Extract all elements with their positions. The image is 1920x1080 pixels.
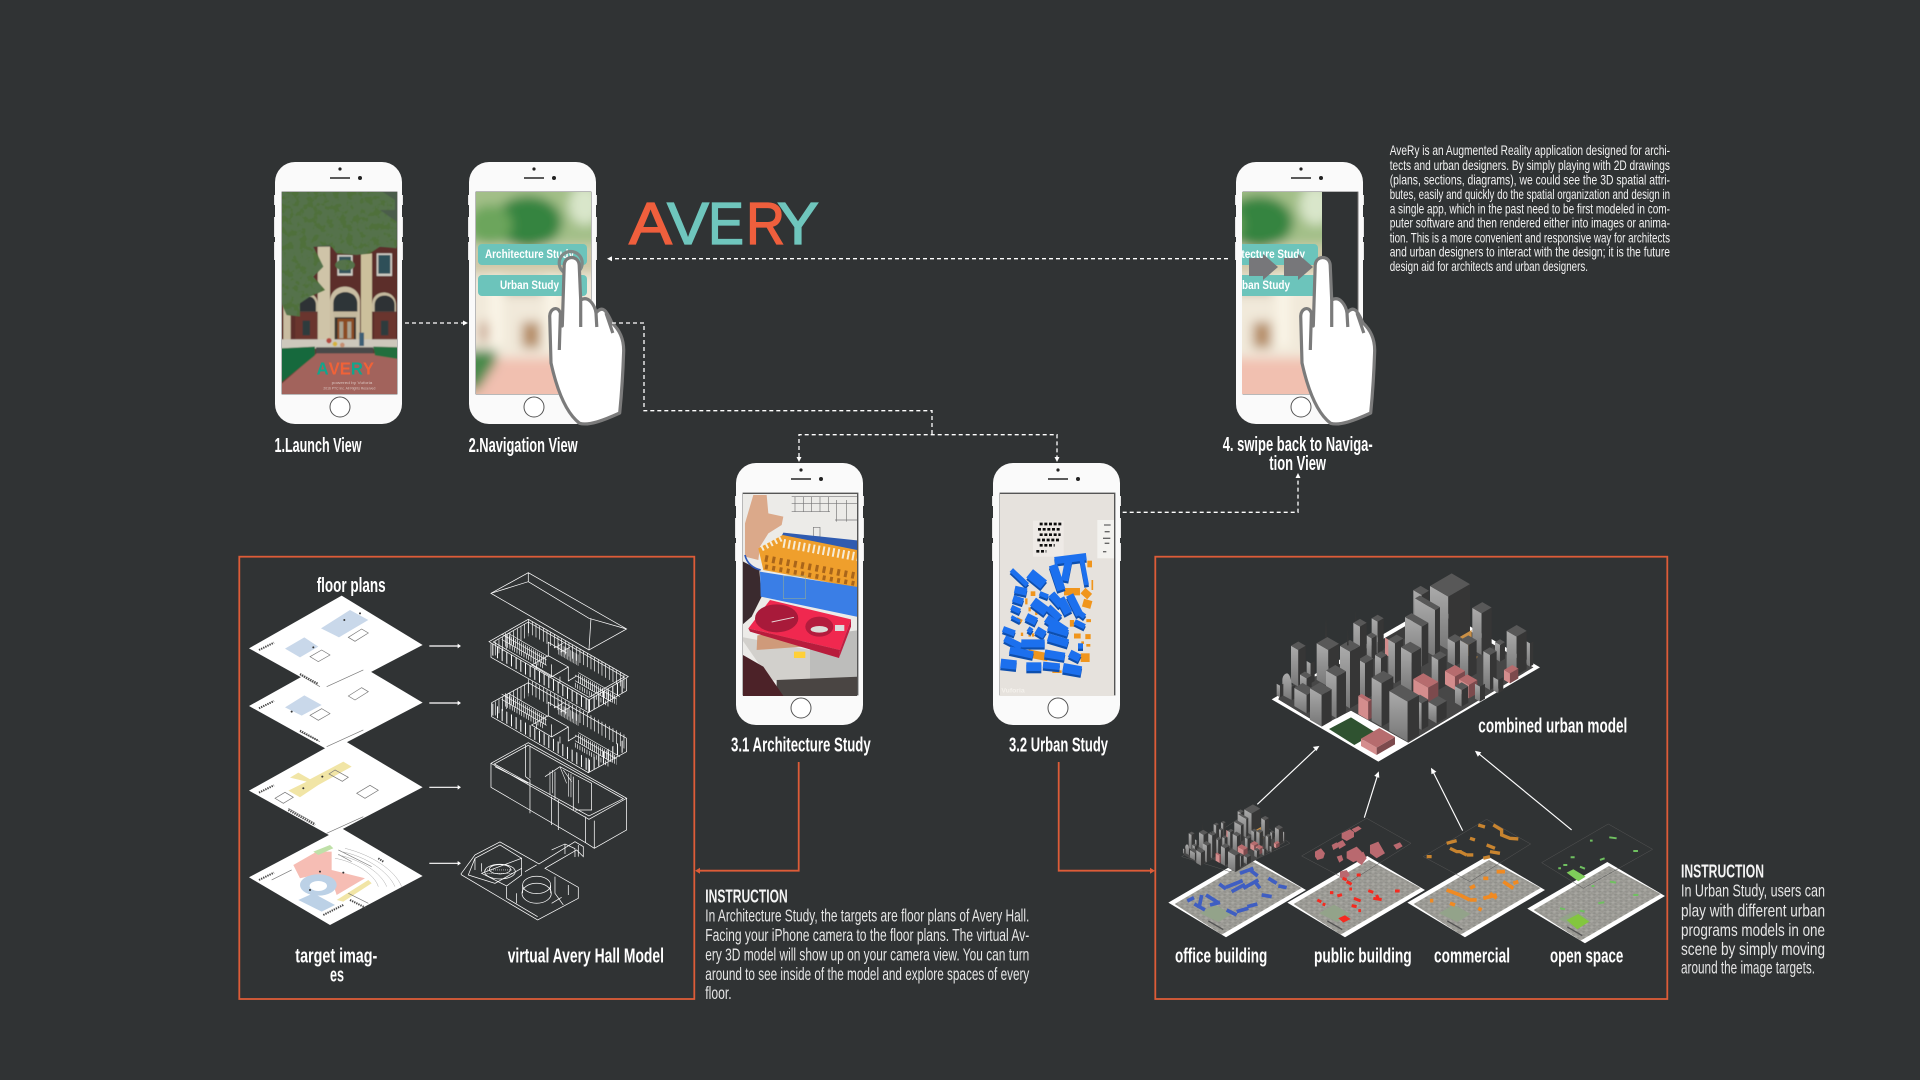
label: office building: office building bbox=[1175, 945, 1267, 967]
swipe screen: Urban Study bbox=[1231, 280, 1291, 292]
text block: urban instruction: scene by simply moving bbox=[1681, 939, 1825, 959]
arrow: urban study to swipe back bbox=[1123, 473, 1300, 512]
text block: urban instruction: play with different urban bbox=[1681, 901, 1825, 921]
arrow: navigation to studies bbox=[612, 323, 1060, 462]
combined urban model bbox=[1272, 573, 1540, 762]
text block: architecture instruction: In Architecture Study, the targets are floor plans of Avery Hall. bbox=[705, 906, 1029, 926]
title: AVERY logo: E bbox=[708, 191, 744, 257]
text block: architecture instruction: ery 3D model will show up on your camera view. You can turn bbox=[705, 944, 1029, 964]
phone: urban study bbox=[992, 463, 1121, 725]
infographic canvas bbox=[238, 145, 1824, 1000]
text block: description: butes, easily and quickly do the spatial organization and design in bbox=[1390, 187, 1670, 202]
text block: description: tion. This is a more convenient and responsive way for architects bbox=[1390, 230, 1670, 245]
navigation screen: Architecture Study bbox=[485, 249, 575, 261]
floor plan stack bbox=[249, 596, 423, 925]
connector: urban to panel bbox=[1059, 762, 1155, 874]
text block: description: AveRy is an Augmented Reality application designed for archi- bbox=[1390, 143, 1670, 158]
arrow: swipe back to navigation bbox=[607, 256, 1228, 261]
icon: swiping hand bbox=[1301, 258, 1375, 424]
urban AR screen bbox=[1000, 494, 1114, 696]
text block: architecture instruction: INSTRUCTION bbox=[705, 886, 788, 907]
label: combined urban model: combined urban model bbox=[1478, 716, 1627, 738]
text block: description: design aid for architects and urban designers. bbox=[1390, 259, 1588, 274]
layer: open space bbox=[1527, 824, 1665, 943]
caption: urban study: 3.2 Urban Study bbox=[1009, 735, 1109, 757]
launch logo: AVERY bbox=[317, 358, 374, 378]
title: AVERY logo: Y bbox=[777, 191, 819, 257]
label: commercial: commercial bbox=[1434, 945, 1510, 967]
caption: swipe back bbox=[1223, 434, 1373, 475]
icon: tapping hand bbox=[550, 258, 624, 424]
title: AVERY logo bbox=[629, 191, 819, 257]
navigation screen bbox=[476, 192, 591, 394]
text block: urban instruction: INSTRUCTION bbox=[1681, 860, 1764, 881]
layer: office building bbox=[1168, 804, 1306, 937]
phone: launch view bbox=[274, 162, 403, 424]
text block: description: (plans, sections, diagrams), we could see the 3D spatial attri- bbox=[1390, 172, 1670, 187]
launch screen photo: 2016 PTC Inc. All Rights Reserved bbox=[323, 387, 375, 391]
title: AVERY logo: A bbox=[629, 191, 673, 257]
label: open space: open space bbox=[1550, 945, 1623, 967]
exploded wireframe model bbox=[461, 573, 628, 920]
arrow: launch to navigation bbox=[405, 320, 468, 326]
panel: architecture study bbox=[239, 557, 694, 999]
architecture AR screen bbox=[740, 492, 860, 698]
launch screen photo bbox=[280, 190, 400, 397]
phone: swipe back view bbox=[1235, 162, 1376, 426]
icon: swipe arrows bbox=[1249, 254, 1313, 280]
layer: public building bbox=[1287, 818, 1425, 937]
urban AR screen: Vuforia bbox=[1001, 687, 1025, 694]
swipe screen: Architecture Study bbox=[1216, 249, 1306, 261]
text block: architecture instruction: Facing your iPhone camera to the floor plans. The virtual Av- bbox=[705, 925, 1029, 945]
tree foliage bbox=[280, 190, 397, 317]
text block: description: a single app, which in the past need to be first modeled in com- bbox=[1390, 201, 1670, 216]
caption: architecture study: 3.1 Architecture Study bbox=[731, 735, 871, 757]
caption: navigation view: 2.Navigation View bbox=[469, 435, 578, 457]
text block: description: and urban designers to interact with the design; it is the future bbox=[1390, 244, 1670, 259]
text block: urban instruction: around the image targets. bbox=[1681, 957, 1815, 977]
arrows: layers to combined model bbox=[1257, 747, 1572, 831]
text block: urban instruction bbox=[1681, 860, 1825, 977]
layer: commercial bbox=[1407, 819, 1545, 937]
label: target images: es bbox=[330, 965, 344, 987]
caption: swipe back: tion View bbox=[1269, 453, 1326, 475]
phone: navigation view bbox=[460, 162, 624, 424]
heading: floor plans: floor plans bbox=[317, 575, 386, 597]
launch screen photo: powered by Vuforia bbox=[332, 380, 373, 385]
label: target images: target imag- bbox=[295, 945, 377, 967]
text block: architecture instruction: around to see inside of the model and explore spaces of every bbox=[705, 964, 1029, 984]
caption: swipe back: 4. swipe back to Naviga- bbox=[1223, 434, 1373, 456]
title: AVERY logo: R bbox=[746, 191, 785, 257]
text block: architecture instruction bbox=[705, 886, 1029, 1003]
text block: urban instruction: In Urban Study, users can bbox=[1681, 881, 1825, 901]
arrows: plans to model bbox=[429, 644, 461, 866]
label: virtual model: virtual Avery Hall Model bbox=[508, 945, 664, 967]
connector: architecture to panel bbox=[695, 762, 799, 874]
text block: urban instruction: programs models in one bbox=[1681, 920, 1825, 940]
label: public building: public building bbox=[1314, 945, 1412, 967]
text block: description bbox=[1390, 143, 1670, 274]
caption: launch view: 1.Launch View bbox=[274, 435, 362, 457]
phone: architecture study bbox=[735, 463, 864, 725]
swipe screen bbox=[1242, 192, 1322, 394]
text block: description: tects and urban designers. By simply playing with 2D drawings bbox=[1390, 158, 1670, 173]
title: AVERY logo: V bbox=[667, 191, 710, 257]
text block: description: puter software and then rendered either into images or anima- bbox=[1390, 215, 1670, 230]
label: target images bbox=[295, 945, 377, 987]
navigation screen: Urban Study bbox=[500, 280, 560, 292]
tap ring bbox=[559, 252, 582, 274]
text block: architecture instruction: floor. bbox=[705, 983, 732, 1003]
panel: urban study bbox=[1155, 557, 1667, 999]
